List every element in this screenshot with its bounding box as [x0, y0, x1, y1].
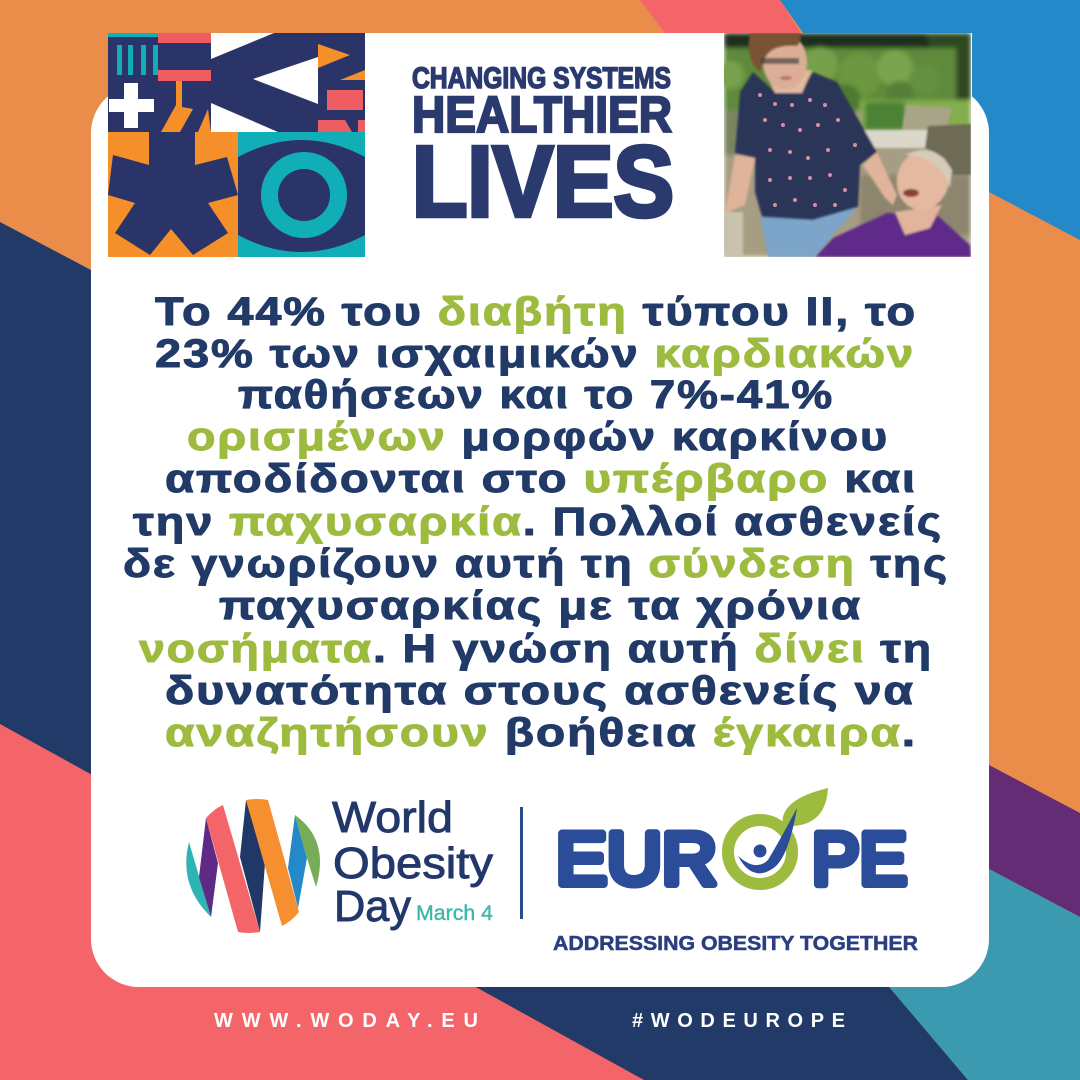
headline: Changing Systems Healthier Lives: LIVES — [412, 126, 674, 238]
main Greek paragraph: 23% των ισχαιμικών καρδιακών — [155, 332, 915, 376]
EUROPE logo: PE — [812, 819, 907, 900]
EUROPE logo — [556, 788, 907, 900]
World Obesity Day wordmark: Day — [334, 882, 411, 931]
main Greek paragraph: ορισμένων μορφών καρκίνου — [187, 415, 889, 459]
main Greek paragraph: παθήσεων και το 7%-41% — [238, 373, 834, 417]
World Obesity Day wordmark: Obesity — [333, 839, 493, 888]
hashtag footer: #WODEUROPE — [632, 1010, 845, 1032]
headline: Changing Systems Healthier Lives: CHANGING SYSTEMS — [412, 62, 671, 95]
main Greek paragraph: νοσήματα . Η γνώση αυτή δίνει τη — [139, 627, 933, 671]
World Obesity Day wordmark: World — [332, 793, 453, 842]
logo divider — [520, 807, 523, 919]
main Greek paragraph: δυνατότητα στους ασθενείς να — [165, 669, 915, 713]
World Obesity Day wordmark — [332, 793, 493, 931]
white rounded card — [91, 85, 989, 987]
World Obesity Day logo mark — [186, 799, 320, 933]
main Greek paragraph: δε γνωρίζουν αυτή τη σύνδεση της — [123, 542, 949, 586]
tagline: ADDRESSING OBESITY TOGETHER — [553, 933, 919, 955]
campaign pictogram collage — [108, 33, 365, 257]
white header strip — [108, 33, 972, 257]
main Greek paragraph: αναζητήσουν βοήθεια έγκαιρα . — [165, 711, 917, 755]
headline: Changing Systems Healthier Lives — [412, 62, 674, 238]
website footer: WWW.WODAY.EU — [214, 1010, 478, 1032]
main Greek paragraph — [123, 290, 949, 755]
main Greek paragraph: παχυσαρκίας με τα χρόνια — [219, 584, 862, 628]
photo: woman and laughing man in a garden — [716, 33, 971, 257]
EUROPE logo: EUR — [556, 819, 717, 900]
main Greek paragraph: αποδίδονται στο υπέρβαρο και — [165, 457, 917, 501]
main Greek paragraph: Το 44% του διαβήτη τύπου ΙΙ, το — [155, 290, 917, 334]
headline: Changing Systems Healthier Lives: HEALTHIER — [412, 86, 672, 143]
World Obesity Day wordmark: March 4 — [416, 902, 493, 925]
main Greek paragraph: την παχυσαρκία . Πολλοί ασθενείς — [133, 500, 943, 544]
